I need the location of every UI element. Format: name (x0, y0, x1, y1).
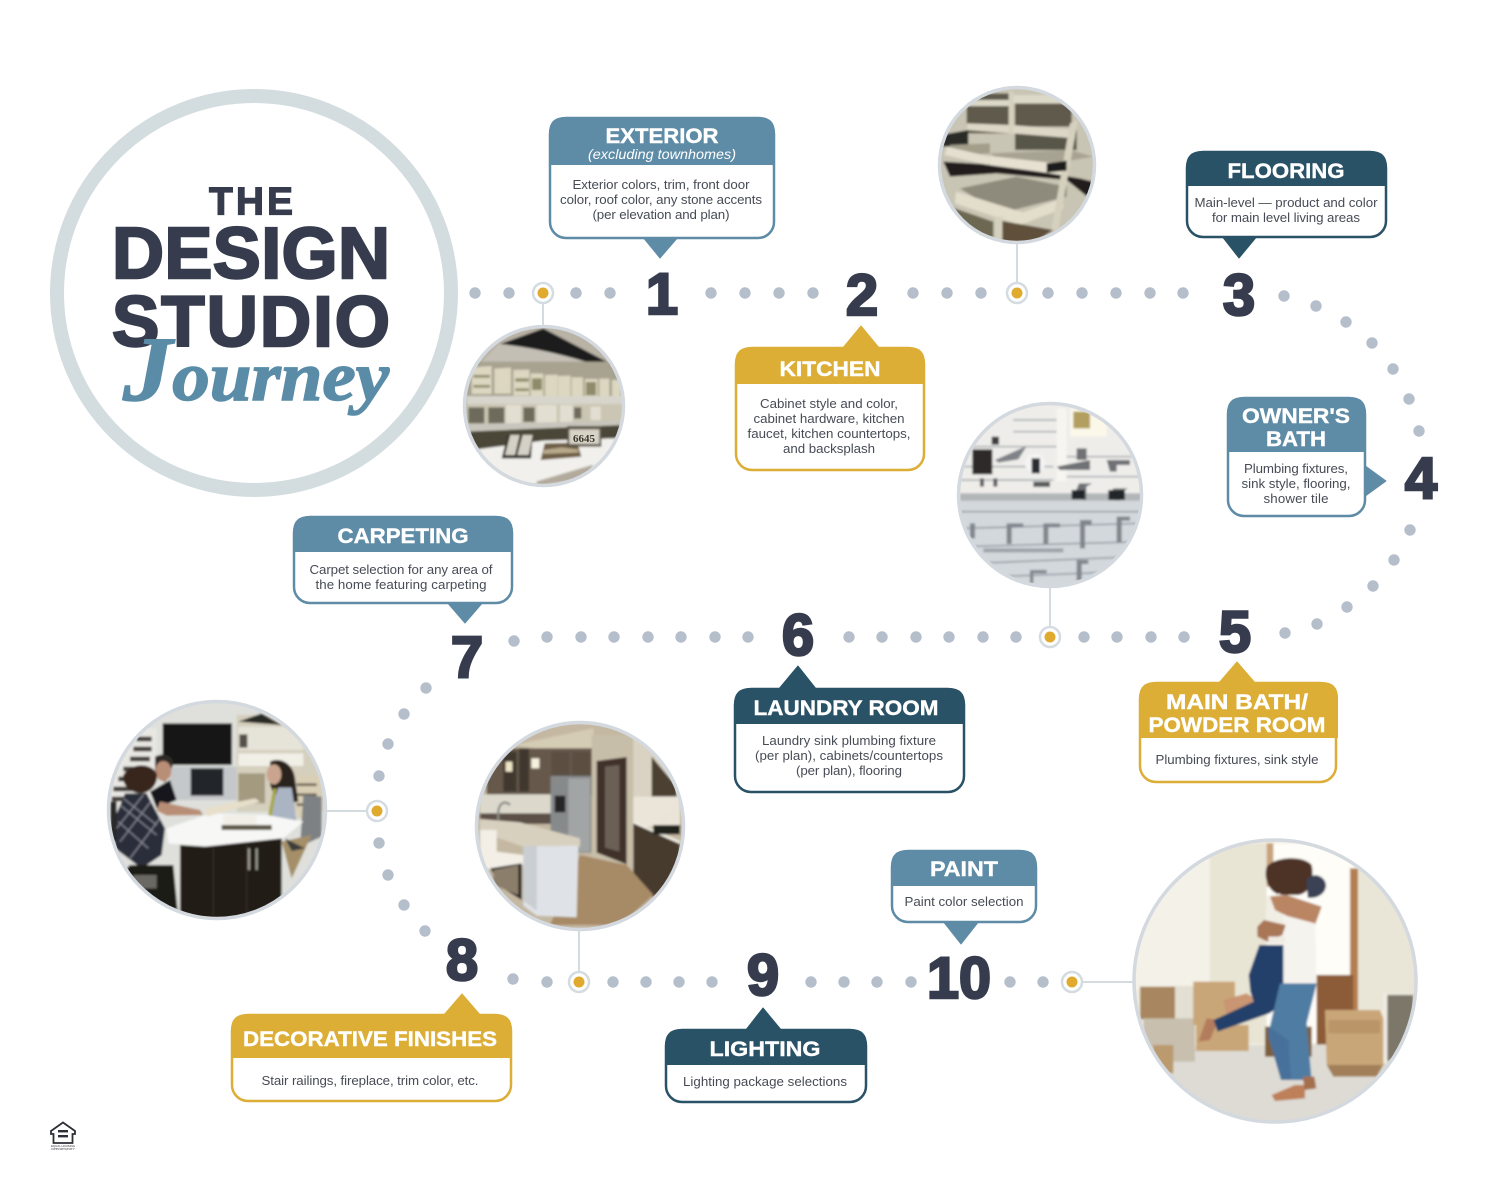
photo: bath fixtures display wall (956, 402, 1144, 588)
logo: title ring (57, 96, 451, 490)
connector lines (326, 242, 1135, 982)
step numbers: 6 (782, 603, 814, 668)
title: The Design Studio (112, 180, 390, 362)
callout: 4 owner's bath: Plumbing fixtures, (1244, 461, 1348, 476)
step numbers: 4 (1405, 446, 1437, 511)
step numbers: 2 (846, 263, 878, 328)
callout: 9 lighting: LIGHTING (710, 1037, 820, 1061)
icon: equal housing opportunity: OPPORTUNITY (51, 1147, 75, 1151)
callout: 3 flooring: FLOORING (1228, 159, 1344, 183)
callout: 1 exterior (549, 117, 775, 258)
title: The Design Studio: STUDIO (112, 283, 390, 362)
callout: 4 owner's bath: OWNER'S (1242, 404, 1350, 428)
icon: equal housing opportunity: EQUAL HOUSING (51, 1144, 76, 1148)
callout: 4 owner's bath: sink style, flooring, (1242, 476, 1350, 491)
callout: 5 main bath / powder room: MAIN BATH/ (1166, 690, 1308, 714)
callout: 7 carpeting: CARPETING (338, 524, 468, 548)
title: Journey script: Journey (122, 318, 390, 420)
callout: 1 exterior: Exterior colors, trim, front door (572, 177, 750, 192)
callout: 1 exterior: (excluding townhomes) (588, 146, 736, 162)
title: The Design Studio: DESIGN (112, 214, 390, 294)
icon: equal housing opportunity (51, 1122, 76, 1151)
callout: 2 kitchen: faucet, kitchen countertops, (748, 426, 910, 441)
callout: 6 laundry room: (per plan), flooring (796, 763, 902, 778)
callout: 8 decorative finishes: DECORATIVE FINISHES (243, 1027, 497, 1051)
callout: 2 kitchen: KITCHEN (780, 357, 880, 381)
callout: 7 carpeting: the home featuring carpeting (316, 577, 486, 592)
photo: finished kitchen (470, 715, 690, 935)
callout: 3 flooring: for main level living areas (1212, 210, 1360, 225)
photo: flooring sample drawers (930, 80, 1097, 247)
callout: 6 laundry room: (per plan), cabinets/countertops (755, 748, 943, 763)
callout: 5 main bath / powder room: Plumbing fixtures, sink style (1156, 752, 1318, 767)
sign number: 6645 (573, 433, 596, 445)
callout: 10 paint: Paint color selection (904, 894, 1024, 909)
callout: 8 decorative finishes (231, 994, 512, 1101)
step numbers: 1 (646, 262, 678, 327)
step numbers (446, 262, 1437, 1011)
step numbers: 5 (1219, 600, 1251, 665)
callout: 2 kitchen: cabinet hardware, kitchen (754, 411, 904, 426)
photo: design consultation at table (106, 700, 328, 920)
callout: 5 main bath / powder room (1139, 662, 1338, 782)
callout: 2 kitchen: Cabinet style and color, (760, 396, 898, 411)
photo: happy couple with moving boxes (1132, 838, 1418, 1124)
callout: 7 carpeting: Carpet selection for any area of (310, 562, 493, 577)
dotted journey path (373, 287, 1425, 988)
callout: 6 laundry room: Laundry sink plumbing fixture (762, 733, 936, 748)
callout: 1 exterior: (per elevation and plan) (592, 207, 730, 222)
callout: 10 paint: PAINT (930, 857, 998, 881)
callout: 4 owner's bath: shower tile (1264, 491, 1328, 506)
step numbers: 9 (747, 943, 779, 1008)
callout: 2 kitchen (735, 326, 925, 470)
callout: 9 lighting: Lighting package selections (683, 1074, 847, 1089)
callout: 10 paint (891, 850, 1037, 944)
step numbers: 8 (446, 928, 478, 993)
step numbers: 3 (1223, 263, 1255, 328)
callout: 8 decorative finishes: Stair railings, fireplace, trim color, etc. (262, 1073, 478, 1088)
photo: exterior selections showroom (460, 320, 630, 490)
title: The Design Studio: THE (209, 180, 293, 224)
callout: 1 exterior: color, roof color, any stone accents (560, 192, 762, 207)
callout: 7 carpeting (293, 516, 513, 623)
gold path nodes (367, 283, 1082, 992)
callout: 4 owner's bath: BATH (1266, 427, 1326, 451)
callout: 3 flooring: Main-level — product and color (1194, 195, 1378, 210)
callout: 6 laundry room (734, 666, 965, 792)
callout: 5 main bath / powder room: POWDER ROOM (1148, 713, 1326, 737)
callout: 2 kitchen: and backsplash (783, 441, 875, 456)
step numbers: 10 (927, 946, 991, 1011)
callout: 1 exterior: EXTERIOR (606, 124, 719, 148)
callout: 4 owner's bath (1227, 397, 1386, 516)
step numbers: 7 (451, 625, 483, 690)
callout: 3 flooring (1186, 151, 1387, 258)
callout: 9 lighting (665, 1008, 867, 1102)
callout: 6 laundry room: LAUNDRY ROOM (754, 696, 938, 720)
